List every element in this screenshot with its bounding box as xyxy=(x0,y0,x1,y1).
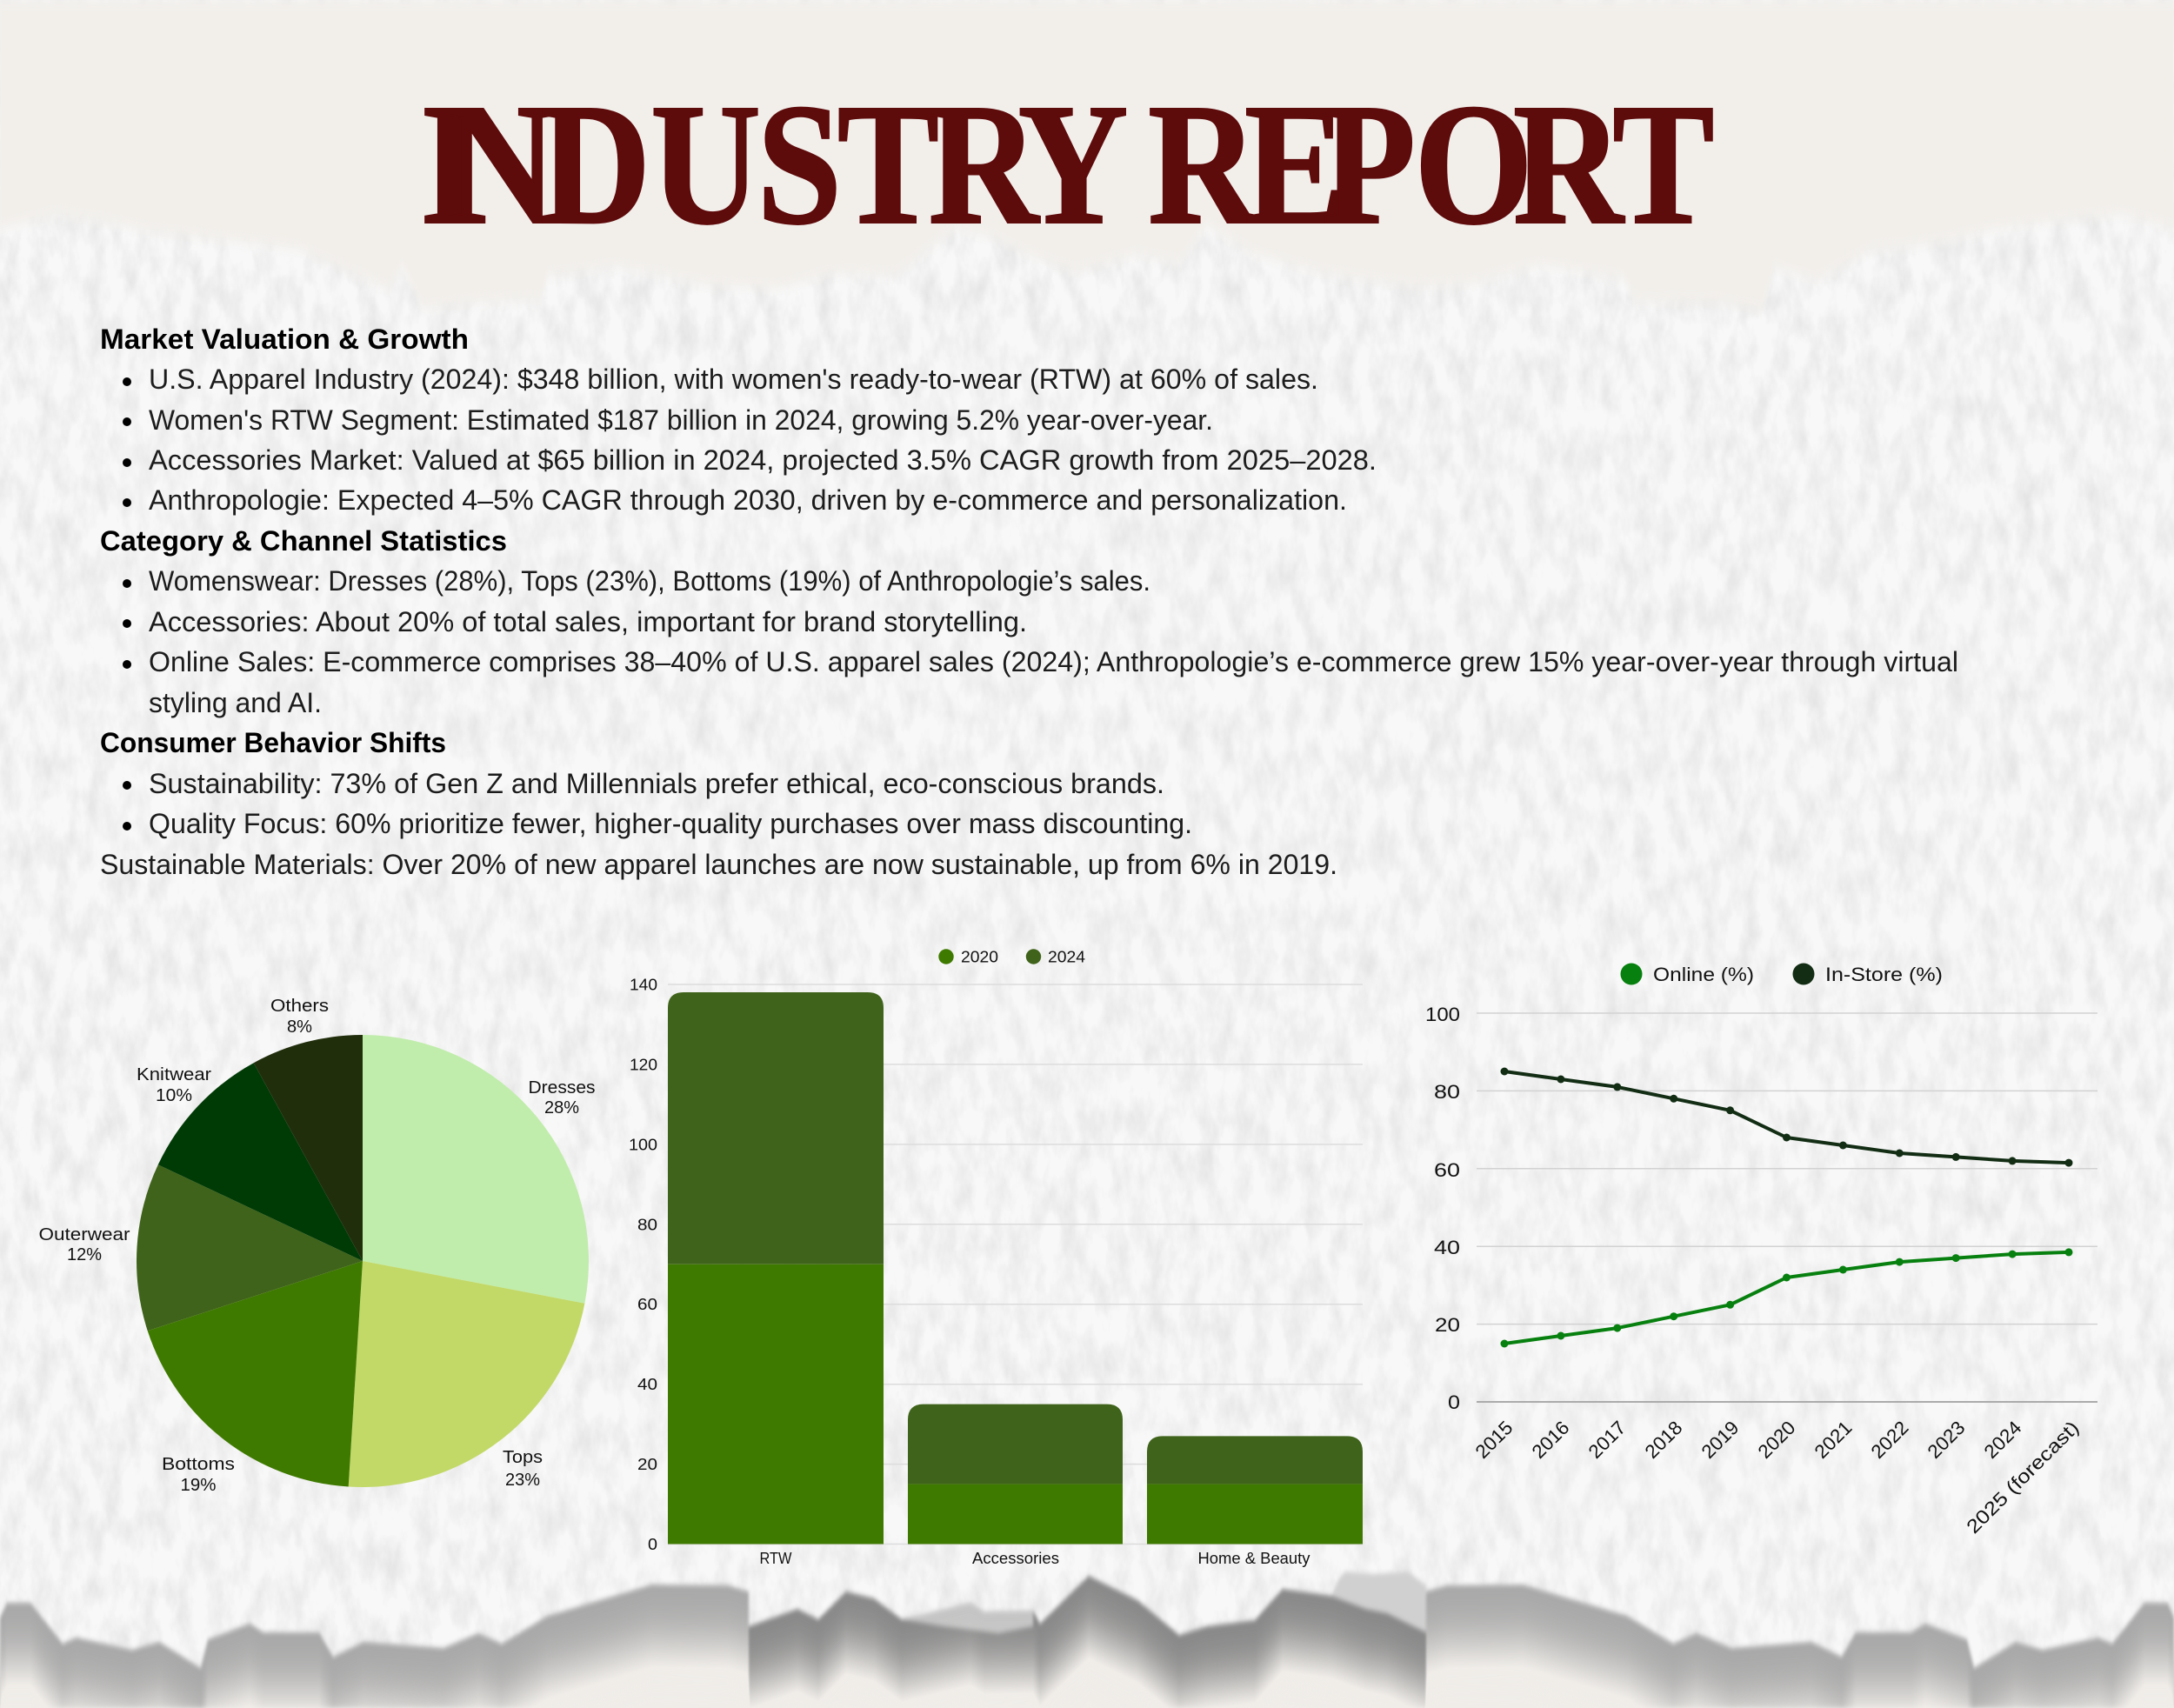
line chart x labels: 2017 xyxy=(1584,1417,1630,1463)
pie labels: Others xyxy=(270,997,329,1016)
heading: market valuation: Market Valuation & Growth xyxy=(100,324,469,355)
bullet list: market valuation xyxy=(123,364,1377,516)
bullet list: category and channel: Online Sales: E-commerce comprises 38–40% of U.S. apparel sales (2024); Anthropologie’s e-commerce grew 15% year-over-year through virtual xyxy=(149,646,1958,677)
pie labels: Tops xyxy=(503,1448,543,1467)
bar chart y axis: 80 xyxy=(637,1216,657,1233)
line: online share xyxy=(1501,1248,2073,1348)
pie labels: Knitwear xyxy=(137,1065,211,1084)
line chart y axis: 40 xyxy=(1434,1237,1460,1258)
bullet list: consumer behavior: Quality Focus: 60% prioritize fewer, higher-quality purchases over mass discounting. xyxy=(149,808,1192,839)
text block: consumer behavior shifts xyxy=(100,727,1192,839)
line chart x labels: 2024 xyxy=(1980,1417,2026,1463)
line chart y axis: 0 xyxy=(1448,1391,1460,1413)
slice: dresses xyxy=(363,1035,589,1304)
text block: category and channel statistics xyxy=(100,525,1958,718)
bar: home and beauty xyxy=(1147,1436,1363,1545)
line chart: online vs in-store xyxy=(1425,964,2097,1538)
pie labels xyxy=(38,997,595,1495)
line chart y axis xyxy=(1425,1004,1460,1413)
pie labels: 23% xyxy=(505,1471,540,1490)
bar chart x labels: Accessories xyxy=(972,1550,1059,1567)
line chart x labels: 2020 xyxy=(1754,1417,1800,1463)
bullet list: market valuation: Women's RTW Segment: Estimated $187 billion in 2024, growing 5.2% year-over-year. xyxy=(149,404,1213,436)
line chart x labels: 2021 xyxy=(1811,1417,1857,1463)
bar chart y axis: 40 xyxy=(637,1376,657,1393)
bullet list: category and channel: Womenswear: Dresses (28%), Tops (23%), Bottoms (19%) of Anthropologie’s sales. xyxy=(149,565,1150,597)
bullet list: market valuation: U.S. Apparel Industry (2024): $348 billion, with women's ready-to-wear (RTW) at 60% of sales. xyxy=(149,364,1318,395)
bullet list: market valuation: Anthropologie: Expected 4–5% CAGR through 2030, driven by e-commerce and personalization. xyxy=(149,484,1347,516)
line chart x labels: 2019 xyxy=(1697,1417,1744,1463)
bullet list: consumer behavior xyxy=(123,768,1192,839)
line chart legend: Online (%) xyxy=(1653,964,1754,985)
bar chart y axis: 60 xyxy=(637,1296,657,1313)
bar chart y axis xyxy=(629,976,657,1553)
bar chart legend: 2020 xyxy=(961,948,998,965)
pie labels: 12% xyxy=(67,1245,102,1264)
line chart y axis: 60 xyxy=(1434,1159,1460,1181)
title: INDUSTRY REPORT xyxy=(420,68,1715,261)
bar: RTW xyxy=(668,992,884,1545)
line chart y axis: 80 xyxy=(1434,1081,1460,1103)
line chart x labels: 2016 xyxy=(1528,1417,1574,1463)
bar chart y axis: 120 xyxy=(630,1056,657,1073)
line chart y axis: 20 xyxy=(1435,1314,1460,1336)
bullet list: category and channel xyxy=(123,565,1958,718)
bar chart legend: 2024 xyxy=(1048,948,1085,965)
torn edge: bottom shadow strips xyxy=(0,1571,2174,1708)
bar chart y axis: 140 xyxy=(630,976,657,993)
line chart x labels: 2022 xyxy=(1867,1417,1913,1463)
line chart y axis: 100 xyxy=(1425,1004,1460,1025)
bar chart x labels xyxy=(760,1550,1310,1567)
bullet list: market valuation: Accessories Market: Valued at $65 billion in 2024, projected 3.5% CAGR growth from 2025–2028. xyxy=(149,444,1377,476)
pie labels: Dresses xyxy=(529,1078,595,1098)
bullet list: category and channel: styling and AI. xyxy=(149,687,322,718)
bar chart legend xyxy=(938,948,1085,965)
pie labels: 28% xyxy=(544,1098,579,1118)
line chart legend: In-Store (%) xyxy=(1825,964,1943,985)
pie labels: Outerwear xyxy=(38,1225,130,1244)
line chart x labels: 2023 xyxy=(1924,1417,1970,1463)
line chart x labels: 2015 xyxy=(1471,1417,1517,1463)
bullet list: consumer behavior: Sustainability: 73% of Gen Z and Millennials prefer ethical, eco-conscious brands. xyxy=(149,768,1164,799)
bar: accessories xyxy=(908,1404,1123,1545)
line chart x labels xyxy=(1471,1417,2084,1538)
pie labels: 19% xyxy=(181,1476,217,1495)
slice: knitwear xyxy=(158,1063,363,1261)
bar chart x labels: RTW xyxy=(760,1550,791,1567)
slice: tops xyxy=(349,1261,584,1487)
text block: market valuation and growth xyxy=(100,324,1377,516)
heading: category and channel: Category & Channel Statistics xyxy=(100,525,507,557)
pie labels: 10% xyxy=(156,1086,192,1105)
line chart x labels: 2025 (forecast) xyxy=(1962,1417,2084,1538)
bar chart y axis: 100 xyxy=(629,1136,657,1153)
slice: bottoms xyxy=(148,1261,363,1487)
heading: consumer behavior: Consumer Behavior Shifts xyxy=(100,727,446,758)
text block: sustainable materials: Sustainable Materials: Over 20% of new apparel launches are now sustainable, up from 6% in 2019. xyxy=(100,849,1337,880)
bullet list: category and channel: Accessories: About 20% of total sales, important for brand storytelling. xyxy=(149,606,1027,637)
slice: others xyxy=(254,1035,363,1261)
torn edge: top beige band xyxy=(0,0,2174,310)
slice: outerwear xyxy=(137,1164,363,1331)
pie labels: 8% xyxy=(287,1017,312,1037)
bar chart x labels: Home & Beauty xyxy=(1198,1550,1310,1567)
line chart legend xyxy=(1621,964,1943,985)
pie labels: Bottoms xyxy=(162,1455,235,1474)
bar chart y axis: 20 xyxy=(637,1456,657,1473)
bar chart: stacked 2020 vs 2024 xyxy=(629,948,1363,1567)
pie chart: category share xyxy=(38,997,595,1495)
line chart x labels: 2018 xyxy=(1641,1417,1687,1463)
bar chart y axis: 0 xyxy=(648,1536,657,1553)
line: in-store share xyxy=(1501,1068,2073,1167)
